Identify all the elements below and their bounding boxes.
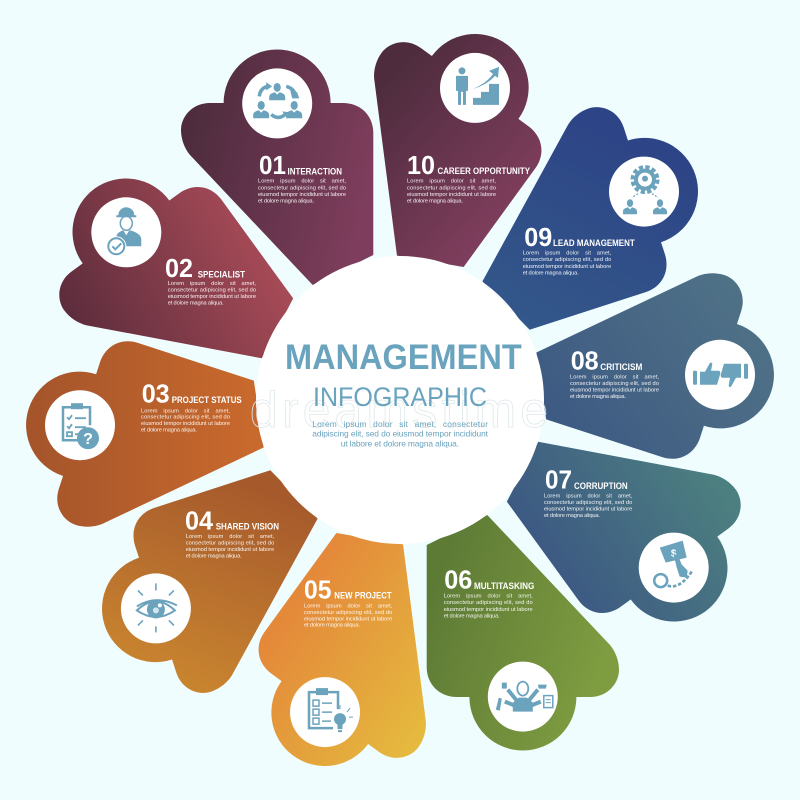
body text 08: et dolore magna aliqua. [570, 394, 626, 400]
title project status: PROJECT STATUS [172, 395, 242, 405]
number 03: 03 [142, 379, 170, 409]
center description: Lorem ipsum dolor sit amet, consectetur [312, 419, 488, 429]
center description: adipiscing elit, sed do eiusmod tempor incididunt [312, 429, 489, 439]
title corruption: CORRUPTION [574, 481, 628, 491]
body text 10: Lorem ipsum dolor sit amet, [407, 179, 496, 185]
body text 03: et dolore magna aliqua. [141, 427, 197, 433]
body text 10: et dolore magna aliqua. [407, 198, 463, 204]
body text 09: consectetur adipiscing elit, sed do [523, 257, 611, 263]
panel: 06 multitasking [427, 515, 619, 750]
icon: specialist with check [91, 197, 161, 267]
body text 01 [258, 179, 346, 204]
body text 09: eiusmod tempor incididunt ut labore [523, 264, 611, 270]
title shared vision: SHARED VISION [216, 521, 279, 531]
panel: 07 corruption [489, 364, 783, 668]
body text 09: et dolore magna aliqua. [523, 270, 579, 276]
body text 08: Lorem ipsum dolor sit amet, [570, 375, 659, 381]
body text 03 [141, 408, 230, 433]
body text 02 [168, 281, 256, 306]
title criticism: CRITICISM [600, 362, 642, 372]
icon: money and handcuff: $ [671, 549, 677, 560]
center description: ut labore et dolore magna aliqua. [341, 439, 459, 449]
body text 01: eiusmod tempor incididunt ut labore [258, 192, 346, 198]
center circle [256, 256, 544, 544]
title multitasking: MULTITASKING [474, 581, 534, 591]
number 10: 10 [407, 150, 435, 180]
number 05: 05 [304, 574, 332, 604]
body text 07: consectetur adipiscing elit, sed do [544, 500, 632, 506]
petal shape 08 [518, 227, 800, 483]
body text 06: Lorem ipsum dolor sit amet, [444, 594, 533, 600]
body text 05 [304, 604, 393, 629]
icon: man and rising stairs [440, 53, 510, 123]
icon: eye [121, 573, 191, 643]
title specialist: SPECIALIST [198, 269, 245, 279]
body text 02: et dolore magna aliqua. [168, 300, 224, 306]
petal shape 01 [181, 49, 373, 285]
petal shape 02 [17, 132, 311, 436]
panel: 01 interaction [181, 49, 373, 285]
number 01: 01 [259, 150, 286, 180]
panel: 02 specialist [17, 132, 311, 436]
body text 07: et dolore magna aliqua. [544, 513, 600, 519]
body text 02: eiusmod tempor incididunt ut labore [168, 294, 256, 300]
body text 04: eiusmod tempor incididunt ut labore [186, 547, 274, 553]
body text 03: Lorem ipsum dolor sit amet, [141, 408, 230, 414]
number 06: 06 [444, 564, 472, 594]
title career opportunity: CAREER OPPORTUNITY [438, 166, 530, 176]
petal shape 05 [216, 509, 510, 800]
number 09: 09 [524, 222, 552, 252]
body text 02: Lorem ipsum dolor sit amet, [168, 281, 256, 287]
body text 08 [570, 375, 659, 400]
watermark: dreamstime [250, 382, 548, 438]
panel: 09 lead management [442, 83, 725, 339]
body text 06 [444, 594, 533, 619]
panel: 03 project status [0, 317, 282, 573]
icon: multitasking person [488, 662, 558, 732]
icon: money and handcuff [639, 533, 709, 603]
panel: 04 shared vision [75, 461, 358, 717]
title interaction: INTERACTION [288, 166, 342, 176]
body text 01: consectetur adipiscing elit, sed do [258, 185, 346, 191]
heading: management: MANAGEMENT [285, 338, 522, 377]
icon: clipboard with question mark: ? [83, 431, 93, 448]
body text 06: eiusmod tempor incididunt ut labore [444, 607, 533, 613]
subheading: infographic: INFOGRAPHIC [313, 382, 487, 412]
petal shape 06 [427, 515, 619, 750]
body text 10: consectetur adipiscing elit, sed do [407, 185, 496, 191]
body text 07: Lorem ipsum dolor sit amet, [544, 494, 633, 500]
body text 02: consectetur adipiscing elit, sed do [168, 288, 256, 294]
body text 04: Lorem ipsum dolor sit amet, [186, 534, 275, 540]
petal shape 09 [442, 83, 725, 339]
petal shape 03 [0, 317, 282, 573]
body text 09 [523, 251, 612, 276]
body text 06: et dolore magna aliqua. [444, 613, 500, 619]
center description [312, 419, 489, 449]
icon: thumbs up and down [685, 340, 755, 410]
body text 05: et dolore magna aliqua. [304, 623, 360, 629]
body text 01: Lorem ipsum dolor sit amet, [258, 179, 346, 185]
petal shape 04 [75, 461, 358, 717]
body text 10 [407, 179, 496, 204]
body text 07 [544, 494, 633, 519]
panel: 10 career opportunity [290, 0, 584, 291]
icon: team cycle [242, 68, 312, 138]
icon: clipboard with question mark [45, 390, 115, 460]
title lead management: LEAD MANAGEMENT [553, 238, 635, 248]
number 04: 04 [185, 505, 214, 535]
body text 03: consectetur adipiscing elit, sed do [141, 415, 230, 421]
title new project: NEW PROJECT [334, 591, 392, 601]
number 07: 07 [545, 465, 572, 495]
panel: 05 new project [216, 509, 510, 800]
icon: checklist with bulb [290, 677, 360, 747]
petal shape 10 [290, 0, 584, 291]
body text 05: consectetur adipiscing elit, sed do [304, 610, 392, 616]
body text 04 [186, 534, 275, 560]
body text 04: et dolore magna aliqua. [186, 554, 242, 560]
body text 05: eiusmod tempor incididunt ut labore [304, 616, 392, 622]
number 02: 02 [165, 253, 193, 283]
body text 01: et dolore magna aliqua. [258, 198, 314, 204]
body text 03: eiusmod tempor incididunt ut labore [141, 421, 230, 427]
body text 09: Lorem ipsum dolor sit amet, [523, 251, 612, 257]
body text 08: consectetur adipiscing elit, sed do [570, 381, 659, 387]
body text 05: Lorem ipsum dolor sit amet, [304, 604, 393, 610]
body text 08: eiusmod tempor incididunt ut labore [570, 388, 659, 394]
body text 04: consectetur adipiscing elit, sed do [186, 541, 274, 547]
body text 10: eiusmod tempor incididunt ut labore [407, 192, 496, 198]
icon: gear and people [609, 157, 679, 227]
body text 06: consectetur adipiscing elit, sed do [444, 600, 533, 606]
petal shape 07 [489, 364, 783, 668]
number 08: 08 [571, 345, 599, 375]
body text 07: eiusmod tempor incididunt ut labore [544, 507, 632, 513]
panel: 08 criticism [518, 227, 800, 483]
